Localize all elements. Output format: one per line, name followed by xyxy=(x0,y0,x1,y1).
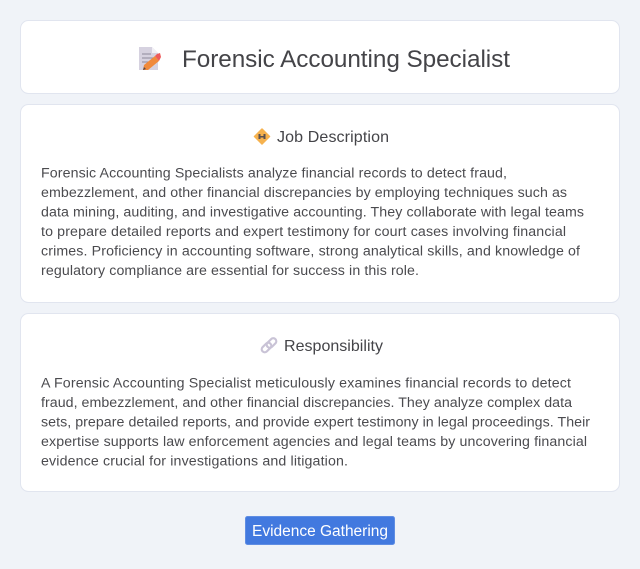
text block: responsibility: evidence crucial for investigations and litigation. xyxy=(41,454,348,470)
text block: responsibility: sets, prepare detailed reports, and provide expert testimony in legal proceedings. Their xyxy=(41,414,590,430)
button: evidence gathering xyxy=(246,516,394,544)
icon: document with pencil xyxy=(139,47,161,70)
heading: job description: Job Description xyxy=(277,129,389,146)
text block: responsibility: fraud, embezzlement, and other financial discrepancies. They analyze complex data xyxy=(41,395,572,411)
panel: title card xyxy=(20,20,620,94)
heading: responsibility: Responsibility xyxy=(284,338,383,355)
text block: job description: to prepare detailed reports and expert testimony for court cases involving financial xyxy=(41,224,566,240)
text block: responsibility: expertise supports law enforcement agencies and legal teams by uncovering financial xyxy=(41,434,587,450)
text block: job description: Forensic Accounting Specialists analyze financial records to detect fraud, xyxy=(41,166,507,182)
icon: diamond sign xyxy=(254,129,270,144)
icon: chain link xyxy=(260,337,278,354)
panel: job description xyxy=(20,104,620,302)
text block: job description: regulatory compliance are essential for success in this role. xyxy=(41,263,419,279)
text block: job description: crimes. Proficiency in accounting software, strong analytical skills, and knowledge of xyxy=(41,244,580,260)
text block: job description: embezzlement, and other financial discrepancies by employing techniques such as xyxy=(41,185,567,201)
text block: responsibility: A Forensic Accounting Specialist meticulously examines financial records to detect xyxy=(41,376,571,392)
text block: job description: data mining, auditing, and investigative accounting. They collaborate with legal teams xyxy=(41,204,584,220)
text block: job description xyxy=(41,166,584,279)
text block: responsibility xyxy=(41,376,590,470)
panel: responsibility xyxy=(20,314,620,492)
title: Forensic Accounting Specialist xyxy=(182,46,510,73)
button: evidence gathering: Evidence Gathering xyxy=(252,523,388,540)
